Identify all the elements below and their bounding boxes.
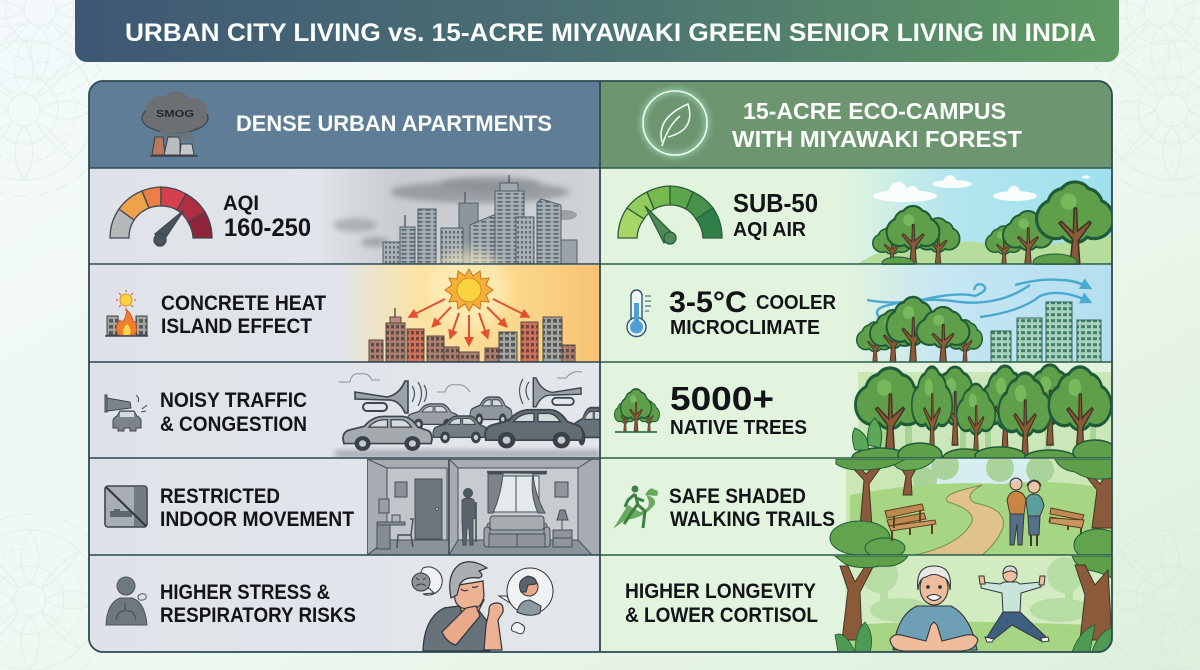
text: concrete heat: ISLAND EFFECT <box>161 315 312 338</box>
row: higher longevity lower cortisol <box>600 555 1112 652</box>
row: concrete heat island effect <box>89 250 600 362</box>
text: safe shaded walking trails: WALKING TRAILS <box>670 508 835 531</box>
row: safe shaded walking trails <box>600 452 1122 561</box>
wind lines <box>867 280 1088 318</box>
header text: DENSE URBAN APARTMENTS <box>236 111 552 136</box>
text: 3-5°C cooler: COOLER <box>756 292 837 314</box>
icon: smog factory: SMOG <box>156 109 194 120</box>
hills <box>857 235 1112 264</box>
text: longevity and cortisol: HIGHER LONGEVITY <box>625 580 816 603</box>
text: longevity and cortisol <box>625 580 818 627</box>
icon: thermometer <box>627 290 651 336</box>
text: 3-5°C cooler: 3-5°C <box>669 286 747 319</box>
text: 3-5°C cooler: MICROCLIMATE <box>670 317 820 339</box>
row: stress and respiratory risks <box>89 555 600 652</box>
row: 5000+ native trees <box>600 362 1117 468</box>
title: URBAN CITY LIVING vs. 15-ACRE MIYAWAKI GREEN SENIOR LIVING IN INDIA <box>125 19 1096 47</box>
text: restricted indoor movement <box>161 488 354 526</box>
text: restricted indoor movement: RESTRICTED <box>160 485 280 508</box>
header: dense urban apartments <box>89 81 600 168</box>
text: AQI 160-250 <box>224 196 310 236</box>
text: safe shaded walking trails <box>669 485 835 531</box>
elderly couple <box>1007 478 1044 546</box>
sun <box>429 250 509 330</box>
right tree and bushes <box>1055 459 1122 561</box>
icon: glowing leaf <box>643 91 707 155</box>
smiling senior with namaste <box>890 566 978 651</box>
tai chi senior <box>979 566 1049 642</box>
clouds <box>873 175 1090 202</box>
smoke puff <box>512 622 525 634</box>
polluted skyline <box>383 175 577 264</box>
hot skyline <box>369 308 575 362</box>
row: sub-50 AQI air <box>600 168 1113 270</box>
icon: no room <box>105 486 147 527</box>
header: eco campus <box>600 81 1112 168</box>
icon: walking trail <box>613 486 658 529</box>
header text <box>732 103 1022 147</box>
text: sub-50 AQI air <box>733 188 818 241</box>
left trees <box>830 459 935 558</box>
column: eco-campus <box>600 81 1122 652</box>
text: 5000+ native trees: 5000+ <box>670 380 774 417</box>
leaves <box>835 622 1112 652</box>
text: longevity and cortisol: & LOWER CORTISOL <box>625 604 818 627</box>
microclimate trees and buildings <box>857 297 1101 362</box>
text: stress and respiratory: HIGHER STRESS & <box>160 581 330 604</box>
header text: 15-ACRE ECO-CAMPUS <box>743 98 1006 124</box>
title banner <box>75 0 1119 62</box>
bubble: angry face <box>412 567 442 595</box>
text: 3-5°C cooler <box>669 286 837 339</box>
gauge: sub-50 AQI <box>618 186 722 244</box>
park scene <box>830 452 1122 561</box>
text: sub-50 AQI air: AQI AIR <box>733 219 807 241</box>
forest yoga scene <box>835 556 1112 652</box>
text: stress and respiratory: RESPIRATORY RISKS <box>160 604 356 627</box>
room: desk and door <box>367 459 449 555</box>
icon: horn and car <box>105 395 147 431</box>
icon: trees <box>614 389 660 432</box>
forest <box>852 365 1117 468</box>
text: AQI 160-250: AQI <box>223 192 259 215</box>
text: sub-50 AQI air: SUB-50 <box>733 188 818 218</box>
side trees <box>835 556 1112 640</box>
column: dense urban apartments <box>89 81 613 652</box>
row: noisy traffic <box>89 362 613 458</box>
trees <box>873 182 1113 270</box>
text: AQI 160-250: 160-250 <box>224 214 311 242</box>
comparison panel <box>89 81 1122 652</box>
text: noisy traffic: & CONGESTION <box>160 413 307 436</box>
horns and sound waves <box>339 372 582 413</box>
text: restricted indoor movement: INDOOR MOVEMENT <box>160 508 354 531</box>
text: noisy traffic <box>160 392 306 431</box>
text: concrete heat: CONCRETE HEAT <box>161 292 326 315</box>
trail <box>915 485 1003 555</box>
icon: smog factory <box>142 91 208 156</box>
text: concrete heat <box>162 296 326 333</box>
text: 5000+ native trees: NATIVE TREES <box>670 417 807 439</box>
row: restricted indoor movement <box>89 458 601 555</box>
traffic cars <box>343 397 613 451</box>
row: cooler microclimate <box>600 265 1112 362</box>
heat arrows <box>411 299 527 343</box>
bubble: coughing <box>499 568 553 615</box>
gauge: AQI 160-250 <box>110 187 212 246</box>
text: safe shaded walking trails: SAFE SHADED <box>669 485 806 508</box>
text: stress and respiratory <box>160 581 356 627</box>
text: 5000+ native trees <box>670 380 807 439</box>
header text: WITH MIYAWAKI FOREST <box>732 126 1022 152</box>
row: AQI 160-250 <box>89 168 600 264</box>
apartment rooms <box>367 459 601 555</box>
benches <box>885 504 1084 541</box>
room: sofa and window <box>449 459 601 555</box>
coughing man <box>423 562 503 651</box>
icon: heat island <box>105 290 148 336</box>
smog clouds <box>333 176 577 247</box>
icon: lungs and person <box>106 577 147 625</box>
text: noisy traffic: NOISY TRAFFIC <box>160 389 307 412</box>
